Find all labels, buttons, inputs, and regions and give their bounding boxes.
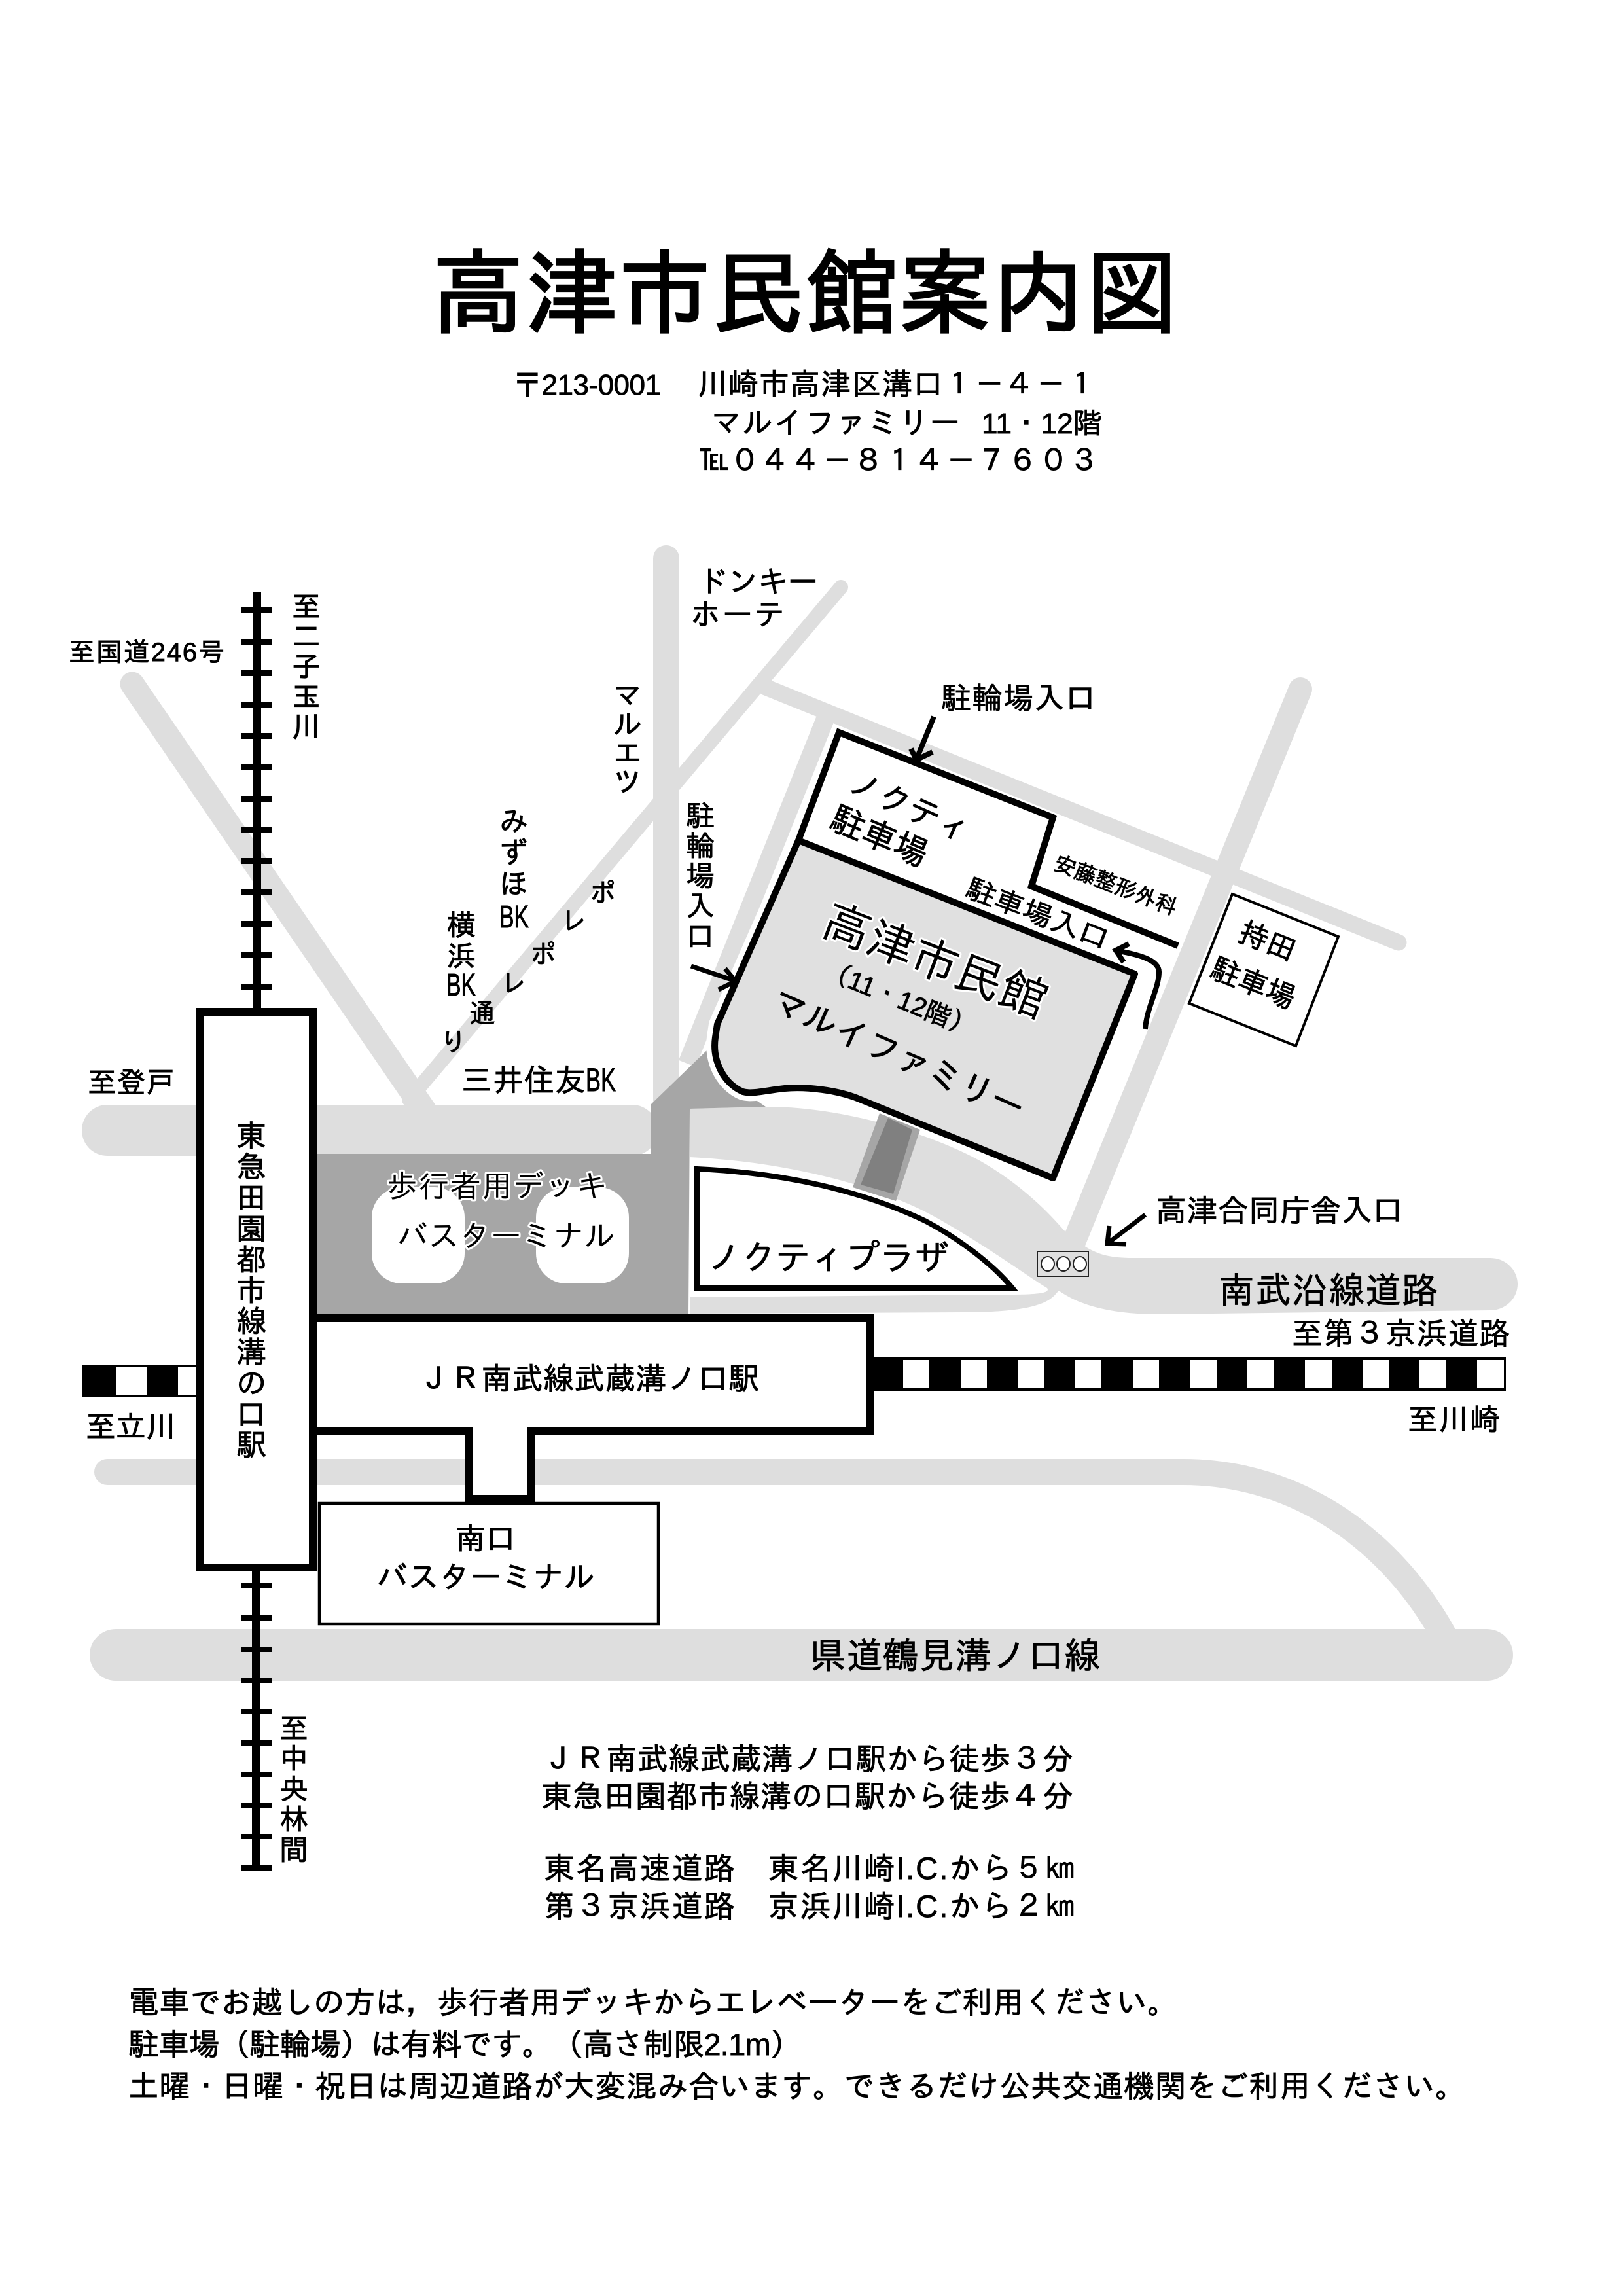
Nocty Plaza building — [697, 1169, 1012, 1288]
address block — [513, 367, 1102, 478]
label: floors: （11・12階） — [819, 956, 980, 1043]
road: south curved road — [107, 1472, 1444, 1636]
Mochida parking box — [1189, 894, 1338, 1046]
label: Pole-Pole street: 通 — [469, 999, 495, 1028]
address block: 川崎市高津区溝口１－４－１ — [698, 367, 1097, 401]
label: Pole-Pole street — [440, 879, 616, 1057]
arrow: parking entrance — [1116, 944, 1159, 1029]
label: government building entrance: 高津合同庁舎入口 — [1156, 1193, 1403, 1228]
label: south exit bus terminal — [377, 1522, 595, 1594]
label: Pole-Pole street: ポ — [530, 941, 556, 969]
notes: 土曜・日曜・祝日は周辺道路が大変混み合います。できるだけ公共交通機関をご利用ください。 — [128, 2069, 1466, 2104]
label: Maruetsu: マルエツ — [613, 680, 642, 798]
road: main horizontal road — [82, 1105, 658, 1156]
label: Ando clinic: 安藤整形外科 — [1051, 851, 1181, 920]
label: to Kawasaki: 至川崎 — [1408, 1403, 1500, 1437]
road: east diagonal — [1073, 689, 1300, 1244]
label: Nambu road: 南武沿線道路 — [1219, 1270, 1438, 1311]
Nambu rail east — [870, 1357, 1506, 1391]
access information: ＪＲ南武線武蔵溝ノ口駅から徒歩３分 — [544, 1742, 1073, 1776]
label: Nocty Plaza: ノクティプラザ — [707, 1239, 949, 1278]
label: Don Quijote: ホーテ — [690, 598, 785, 632]
label: Mitsui Sumitomo BK: BK — [586, 1062, 616, 1098]
access information: 第３京浜道路 京浜川崎I.C.から２㎞ — [544, 1889, 1076, 1924]
access information — [541, 1742, 1076, 1924]
label: Nocty: ノクティ — [842, 764, 976, 850]
arrow: government building entrance — [1107, 1215, 1145, 1244]
label: Pole-Pole street: り — [440, 1028, 467, 1057]
Nocty parking outline — [798, 732, 1178, 946]
notes: 電車でお越しの方は，歩行者用デッキからエレベーターをご利用ください。 — [128, 1985, 1178, 2020]
label: Pole-Pole street: レ — [501, 969, 527, 998]
label: parking: 駐車場 — [825, 800, 933, 874]
label: Mochida parking: 持田 — [1234, 915, 1301, 968]
label: to Noborito: 至登戸 — [88, 1067, 175, 1099]
label: Pole-Pole street: レ — [561, 907, 587, 936]
label: to Route 246: 至国道246号 — [69, 638, 224, 667]
access information: 東名高速道路 東名川崎I.C.から５㎞ — [544, 1851, 1076, 1886]
traffic signal — [1037, 1251, 1088, 1276]
road: diagonal from Route 246 — [132, 684, 426, 1113]
label: to Chuo-Rinkan: 至中央林間 — [279, 1713, 308, 1867]
Takatsu Civic Hall building — [715, 840, 1135, 1178]
arrow: bicycle entrance top — [911, 717, 934, 760]
label: bus terminal: バスターミナル — [397, 1219, 615, 1253]
Mizonokuchi station box — [200, 1012, 313, 1568]
road: vertical north road — [653, 558, 679, 1113]
label: Mochida parking — [1206, 915, 1301, 1015]
address block: 〒213-0001 — [513, 369, 661, 401]
road: prefectural road — [90, 1629, 1513, 1681]
address block: 11・12階 — [982, 408, 1102, 440]
address block: マルイファミリー — [711, 406, 960, 440]
label: parking entrance: 駐車場入口 — [961, 873, 1113, 956]
label: Yokohama BK — [446, 910, 476, 1003]
label: Denentoshi station: 東急田園都市線溝の口駅 — [236, 1119, 266, 1462]
Nambu rail west — [82, 1365, 200, 1397]
road network — [82, 558, 1518, 1681]
label: south exit bus terminal: 南口 — [455, 1522, 516, 1556]
label: Mizuho BK: みずほ — [499, 806, 528, 901]
access information: 東急田園都市線溝の口駅から徒歩４分 — [541, 1779, 1073, 1814]
label: bicycle entrance left: 駐輪場入口 — [686, 800, 715, 953]
label: deck: 歩行者用デッキ — [387, 1169, 607, 1204]
label: south exit bus terminal: バスターミナル — [377, 1560, 595, 1594]
building halo — [715, 840, 1135, 1178]
arrow: bicycle entrance left — [691, 966, 736, 990]
label: Mochida parking: 駐車場 — [1206, 952, 1300, 1015]
bus terminal island right — [536, 1187, 629, 1283]
plaza island — [690, 1157, 1048, 1297]
label: Mitsui Sumitomo BK: 三井住友 — [461, 1063, 586, 1098]
Denentoshi rail south — [241, 1570, 272, 1871]
address block: ℡０４４－８１４－７６０３ — [699, 444, 1099, 478]
south bus terminal box — [319, 1503, 658, 1624]
label: bicycle entrance top: 駐輪場入口 — [941, 681, 1096, 715]
road: north-side street — [766, 687, 1399, 942]
label: to Futako-Tamagawa: 至二子玉川 — [292, 591, 321, 744]
label: Don Quijote — [690, 565, 818, 632]
label: to Daisan Keihin: 至第３京浜道路 — [1292, 1316, 1510, 1351]
label: Marui Family: マルイファミリー — [766, 983, 1030, 1128]
label: Pole-Pole street: ポ — [590, 879, 616, 908]
road: side street beside building — [687, 714, 827, 1064]
bus terminal island left — [372, 1187, 465, 1283]
pedestrian bridge — [853, 1113, 920, 1201]
notes — [128, 1985, 1466, 2104]
label: Yokohama BK: BK — [446, 968, 476, 1003]
label: Yokohama BK: 横浜 — [447, 910, 476, 973]
road: diagonal to Don Quijote (Pole-Pole street) — [409, 587, 841, 1100]
label: Takatsu Civic Hall: 高津市民館 — [815, 895, 1054, 1028]
label: to Tachikawa: 至立川 — [86, 1410, 176, 1444]
JR Musashi-Mizonokuchi station — [317, 1318, 870, 1499]
label: Don Quijote: ドンキー — [698, 565, 818, 599]
label: JR station: ＪＲ南武線武蔵溝ノ口駅 — [419, 1361, 759, 1396]
label: Mizuho BK: BK — [499, 900, 529, 935]
Denentoshi rail north — [241, 592, 272, 1011]
title: 高津市民館案内図 — [432, 242, 1178, 346]
road: Nambu line road — [690, 1107, 1518, 1314]
label: prefectural road: 県道鶴見溝ノ口線 — [810, 1636, 1100, 1676]
notes: 駐車場（駐輪場）は有料です。（高さ制限2.1m） — [128, 2027, 801, 2062]
pedestrian deck area — [317, 1047, 766, 1316]
